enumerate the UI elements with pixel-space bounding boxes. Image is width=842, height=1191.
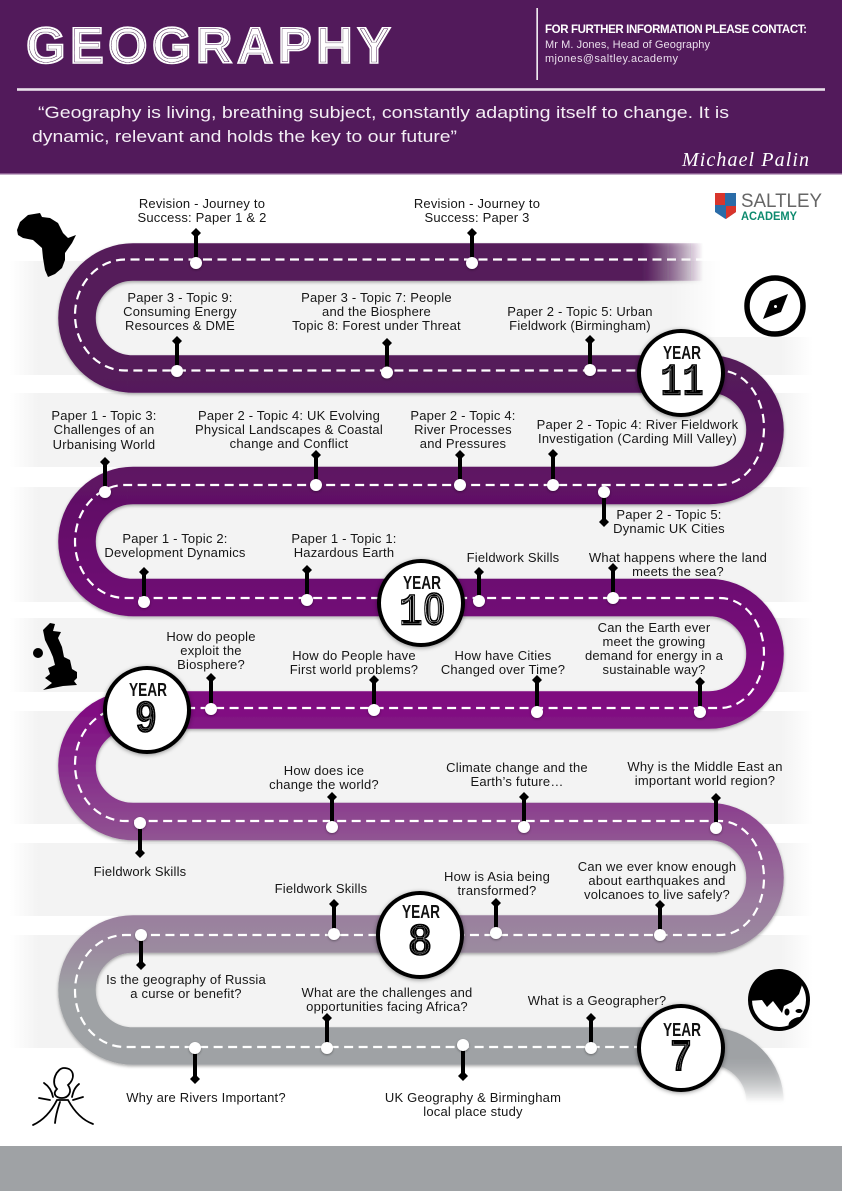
milestone: UK Evolving Physical Landscapes [195, 408, 383, 491]
year 8 badge: 8 [408, 917, 432, 969]
milestone: Middle East: Why is the Middle East an [627, 759, 783, 774]
milestone: First world problems [290, 648, 418, 716]
milestone: Development Dynamics: Paper 1 - Topic 2: [122, 531, 228, 546]
milestone: Cities changed over time: Changed over Time? [441, 662, 565, 677]
year 10 badge: YEAR [403, 573, 441, 593]
milestone: Asia transformed [444, 869, 550, 939]
milestone: River Fieldwork [537, 417, 739, 491]
milestone: Development Dynamics: Development Dynamics [104, 545, 246, 560]
year 9 badge [105, 668, 189, 752]
milestone: First world problems: First world problems? [290, 662, 418, 677]
icon: volcano [33, 1068, 93, 1125]
milestone: Africa challenges: opportunities facing Africa? [306, 999, 468, 1014]
milestone: Challenges of an Urbanising World [51, 408, 157, 498]
milestone: Geography of Russia: Is the geography of Russia [106, 972, 266, 987]
milestone: Development Dynamics [104, 531, 246, 608]
milestone: UK Evolving Physical Landscapes: Paper 2 - Topic 4: UK Evolving [198, 408, 380, 423]
year 7 badge: YEAR [663, 1020, 701, 1040]
logo [715, 191, 822, 223]
milestone: River Processes: and Pressures [420, 436, 507, 451]
milestone: Dynamic UK Cities: Paper 2 - Topic 5: [616, 507, 722, 522]
year 9 badge: 9 [134, 694, 158, 746]
year 8 badge [378, 893, 462, 977]
milestone: River Processes: River Processes [414, 422, 512, 437]
quote: “Geography is living, breathing subject, constantly adapting itself to change. It is [38, 103, 729, 122]
background bands [10, 261, 813, 1048]
milestone: People and the Biosphere: Topic 8: Forest under Threat [292, 318, 461, 333]
milestone: Revision Paper 1 and 2: Success: Paper 1 & 2 [137, 210, 267, 225]
milestone: Challenges of an Urbanising World: Challenges of an [54, 422, 154, 437]
contact details: mjones@saltley.academy [545, 53, 678, 65]
milestone: UK Evolving Physical Landscapes: change and Conflict [230, 436, 349, 451]
milestone: Climate change [446, 760, 588, 833]
milestone: River Processes [410, 408, 516, 491]
milestone: Rivers [126, 1042, 286, 1105]
milestone: Fieldwork Skills Year 8 lower [94, 817, 187, 879]
milestone: Earthquakes and volcanoes: Can we ever know enough [578, 859, 736, 874]
contact details: Mr M. Jones, Head of Geography [545, 39, 710, 51]
milestone: Growing demand for energy: meet the growing [603, 634, 705, 649]
milestone: Africa challenges [302, 985, 472, 1054]
quote [32, 103, 729, 146]
milestone: Earthquakes and volcanoes [578, 859, 736, 941]
milestone: Growing demand for energy [585, 620, 724, 718]
icon: compass [747, 278, 803, 334]
icon: United Kingdom [33, 623, 77, 690]
milestone: How does ice change the world: How does ice [284, 763, 364, 778]
milestone: Earthquakes and volcanoes: volcanoes to live safely? [584, 887, 730, 902]
milestone: First world problems: How do People have [292, 648, 416, 663]
milestone: Fieldwork Skills Year 8 upper: Fieldwork Skills [275, 881, 368, 896]
milestone: UK Geography and Birmingham [385, 1039, 561, 1119]
milestone: Revision Paper 3: Revision - Journey to [414, 196, 540, 211]
contact details [545, 24, 807, 65]
year 8 badge: YEAR [402, 902, 440, 922]
milestone: Fieldwork Skills Year 10 [467, 550, 560, 607]
milestone: Rivers: Why are Rivers Important? [126, 1090, 286, 1105]
milestone: Climate change: Climate change and the [446, 760, 588, 775]
milestone: Hazardous Earth [291, 531, 397, 606]
milestone: Geography of Russia: a curse or benefit? [130, 986, 242, 1001]
milestone: River Fieldwork: Investigation (Carding Mill Valley) [538, 431, 737, 446]
milestone: Fieldwork Skills Year 8 lower: Fieldwork Skills [94, 864, 187, 879]
milestone: Consuming Energy: Consuming Energy [123, 304, 237, 319]
milestone: Revision Paper 1 and 2 [137, 196, 267, 269]
milestone: Revision Paper 1 and 2: Revision - Journey to [139, 196, 265, 211]
title: GEOGRAPHY [26, 17, 391, 74]
milestone: Fieldwork Skills Year 10: Fieldwork Skills [467, 550, 560, 565]
milestone: How does ice change the world: change the world? [269, 777, 379, 792]
milestone: Cities changed over time [441, 648, 565, 718]
milestone: Urban Fieldwork [507, 304, 653, 376]
milestone: Geography of Russia [106, 929, 266, 1001]
milestone: Exploit the Biosphere: How do people [166, 629, 256, 644]
milestone: Middle East: important world region? [635, 773, 775, 788]
year 10 badge [379, 561, 463, 645]
year 7 badge [639, 1006, 723, 1090]
icon: globe [749, 968, 808, 1029]
year 10 badge: 10 [399, 585, 445, 640]
milestone: Challenges of an Urbanising World: Paper 1 - Topic 3: [51, 408, 157, 423]
milestone: Revision Paper 3: Success: Paper 3 [424, 210, 530, 225]
milestone: Cities changed over time: How have Cities [455, 648, 552, 663]
logo: SALTLEY [741, 191, 822, 212]
contact details: FOR FURTHER INFORMATION PLEASE CONTACT: [545, 24, 807, 36]
milestone: Exploit the Biosphere: exploit the [180, 643, 242, 658]
milestone: Growing demand for energy: sustainable way? [603, 662, 705, 677]
milestone: Earthquakes and volcanoes: about earthquakes and [588, 873, 726, 888]
milestone: UK Geography and Birmingham: UK Geography & Birmingham [385, 1090, 561, 1105]
milestone: Fieldwork Skills Year 8 upper [275, 881, 368, 940]
milestone: How does ice change the world [269, 763, 379, 833]
quote: dynamic, relevant and holds the key to our future” [32, 127, 457, 146]
milestone: River Fieldwork: Paper 2 - Topic 4: River Fieldwork [537, 417, 739, 432]
quote attribution: Michael Palin [681, 149, 809, 171]
winding road [75, 260, 765, 1102]
milestone: River Processes: Paper 2 - Topic 4: [410, 408, 516, 423]
milestone: People and the Biosphere: and the Biosphere [322, 304, 431, 319]
milestone: Middle East [627, 759, 783, 834]
milestone: Consuming Energy: Resources & DME [125, 318, 235, 333]
milestone: Dynamic UK Cities [598, 486, 725, 536]
milestone: Africa challenges: What are the challenges and [302, 985, 472, 1000]
milestone: UK Evolving Physical Landscapes: Physical Landscapes & Coastal [195, 422, 383, 437]
year 9 badge: YEAR [129, 680, 167, 700]
milestone: Dynamic UK Cities: Dynamic UK Cities [613, 521, 725, 536]
footer bar [0, 1146, 842, 1191]
milestone: Urban Fieldwork: Paper 2 - Topic 5: Urban [507, 304, 653, 319]
milestone: Hazardous Earth: Paper 1 - Topic 1: [291, 531, 397, 546]
year 11 badge: YEAR [663, 343, 701, 363]
milestone: People and the Biosphere: Paper 3 - Topic 7: People [301, 290, 452, 305]
milestone: Climate change: Earth’s future… [470, 774, 564, 789]
milestone: Hazardous Earth: Hazardous Earth [294, 545, 394, 560]
milestone: Challenges of an Urbanising World: Urbanising World [53, 437, 155, 452]
milestone: Consuming Energy [123, 290, 237, 377]
milestone: People and the Biosphere [292, 290, 461, 378]
milestone: What is a Geographer [528, 993, 666, 1054]
icon: Africa [17, 213, 76, 277]
year 11 badge: 11 [660, 357, 704, 409]
milestone: Asia transformed: How is Asia being [444, 869, 550, 884]
milestone: Land meets the sea: meets the sea? [632, 564, 724, 579]
milestone: Growing demand for energy: Can the Earth ever [598, 620, 711, 635]
milestone: UK Geography and Birmingham: local place study [423, 1104, 523, 1119]
milestone: Land meets the sea: What happens where the land [589, 550, 767, 565]
milestone: Exploit the Biosphere [166, 629, 256, 715]
milestone: Revision Paper 3 [414, 196, 540, 269]
milestone: What is a Geographer: What is a Geographer? [528, 993, 666, 1008]
milestone: Consuming Energy: Paper 3 - Topic 9: [127, 290, 233, 305]
header banner [0, 0, 842, 174]
milestone: Exploit the Biosphere: Biosphere? [177, 657, 245, 672]
milestone: Land meets the sea [589, 550, 767, 604]
logo: ACADEMY [741, 211, 797, 223]
milestone: Asia transformed: transformed? [458, 883, 536, 898]
milestone: Growing demand for energy: demand for energy in a [585, 648, 724, 663]
year 7 badge: 7 [670, 1033, 692, 1085]
milestone: Urban Fieldwork: Fieldwork (Birmingham) [509, 318, 651, 333]
year 11 badge [639, 331, 723, 415]
